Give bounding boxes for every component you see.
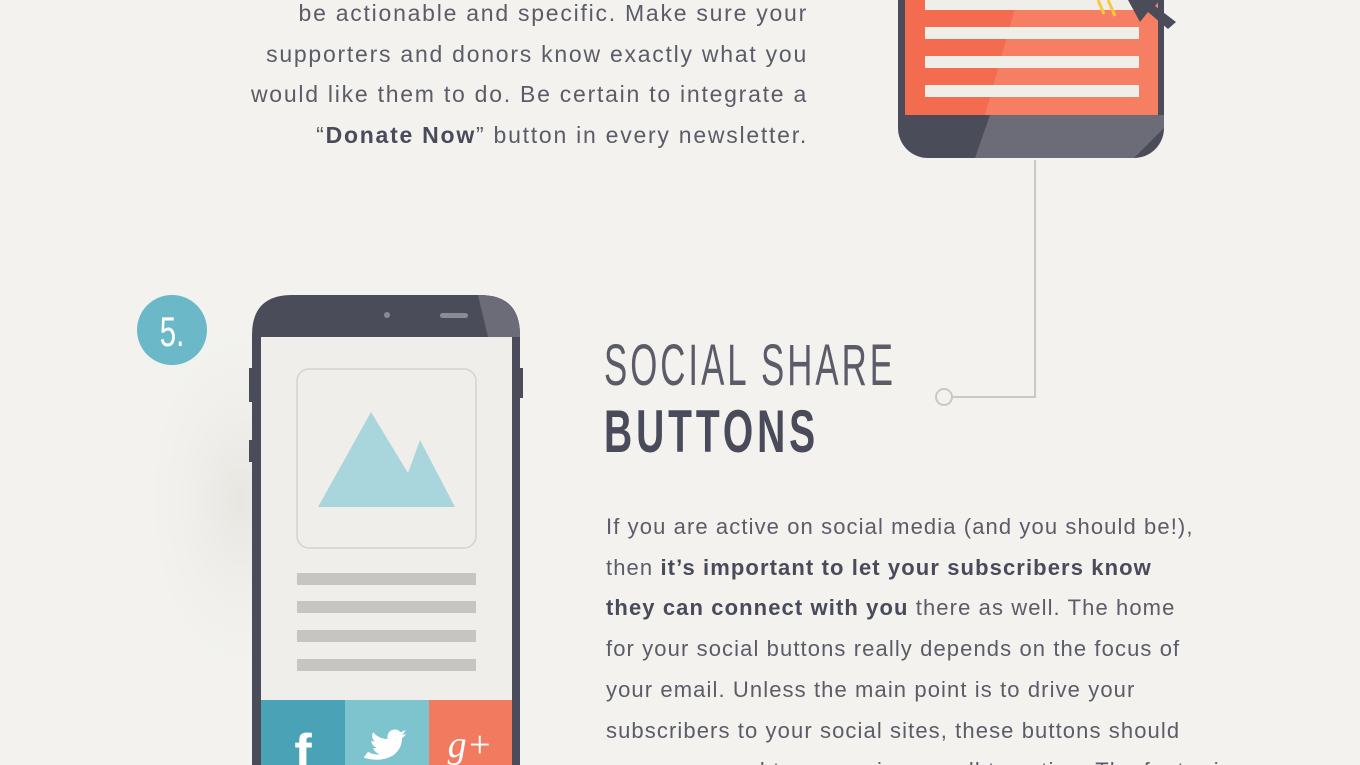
top text block: supporters and donors know exactly what you <box>266 41 808 67</box>
top text block: be actionable and specific. Make sure your <box>299 0 808 26</box>
paragraph <box>606 514 1232 765</box>
number badge 5: 5. <box>160 308 184 355</box>
paragraph: they can connect with you there as well. The home <box>606 595 1175 620</box>
heading: SOCIAL SHARE <box>604 333 896 398</box>
text: BUTTONS <box>604 398 819 465</box>
top text block: “Donate Now” button in every newsletter. <box>316 122 808 148</box>
icon: cursor <box>1128 0 1176 29</box>
paragraph: then it’s important to let your subscribers know <box>606 555 1152 580</box>
paragraph: subscribers to your social sites, these buttons should <box>606 718 1180 743</box>
image placeholder <box>297 369 476 548</box>
phone shadow <box>130 300 350 700</box>
paragraph: If you are active on social media (and you should be!), <box>606 514 1194 539</box>
number badge 5 <box>137 295 207 365</box>
tablet device <box>898 0 1176 158</box>
paragraph: your email. Unless the main point is to drive your <box>606 677 1135 702</box>
paragraph: for your social buttons really depends on the focus of <box>606 636 1180 661</box>
phone: g+ <box>448 724 492 765</box>
phone <box>249 295 523 765</box>
social buttons <box>261 700 345 765</box>
top text block: would like them to do. Be certain to integrate a <box>251 81 808 107</box>
connector line <box>936 160 1035 405</box>
top text block <box>251 0 808 148</box>
